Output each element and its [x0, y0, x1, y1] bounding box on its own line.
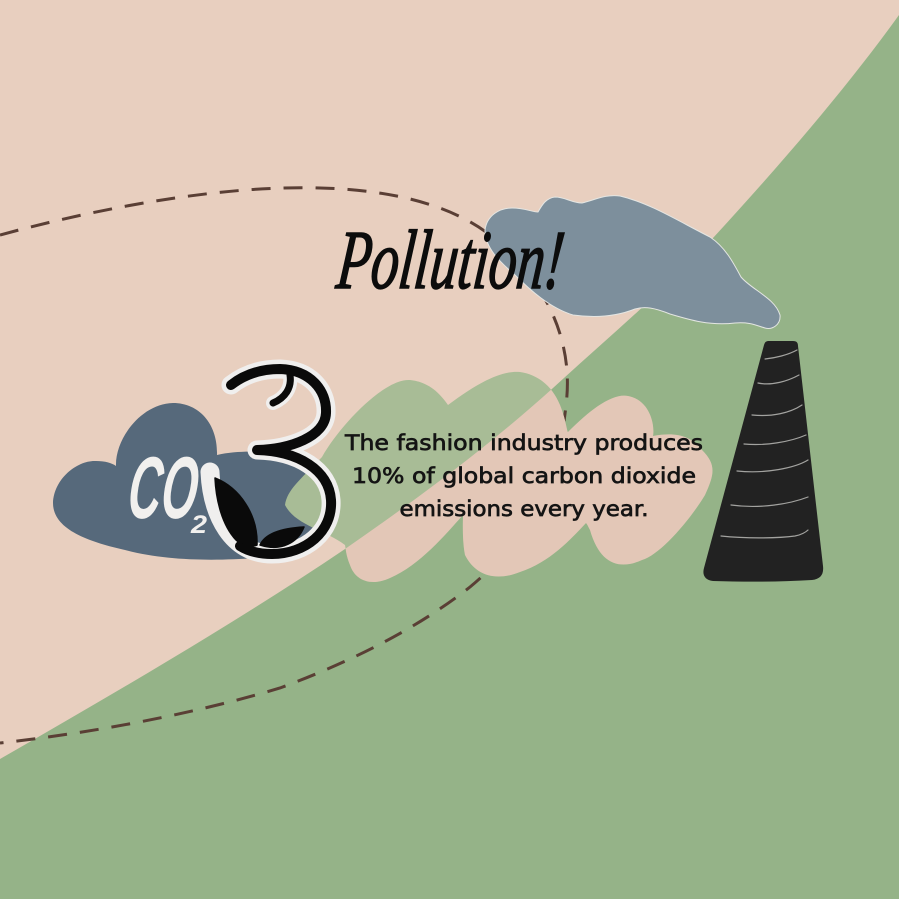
- factory chimney: [703, 341, 823, 582]
- title: Pollution!: [332, 214, 569, 307]
- CO2 cloud: [53, 403, 326, 560]
- CO2 label: 2: [190, 511, 207, 539]
- black stroke: [231, 369, 331, 554]
- cloud shape: [53, 403, 326, 560]
- statistic text: [344, 431, 703, 522]
- large leaf: [215, 478, 257, 546]
- chimney ridges: [721, 350, 808, 538]
- sprout number 3 icon: [210, 369, 331, 554]
- CO2 label: CO: [124, 438, 203, 537]
- text blob: colour-inverting cloud: [280, 365, 720, 590]
- smoke cloud: [485, 196, 780, 328]
- chimney body: [703, 341, 823, 582]
- statistic text: emissions every year.: [400, 497, 648, 522]
- white halo: [210, 369, 331, 554]
- small leaf: [260, 527, 304, 547]
- CO2 label: [124, 438, 207, 539]
- statistic text: The fashion industry produces: [344, 431, 703, 456]
- dashed looping path: [0, 188, 567, 743]
- statistic text: 10% of global carbon dioxide: [352, 464, 696, 489]
